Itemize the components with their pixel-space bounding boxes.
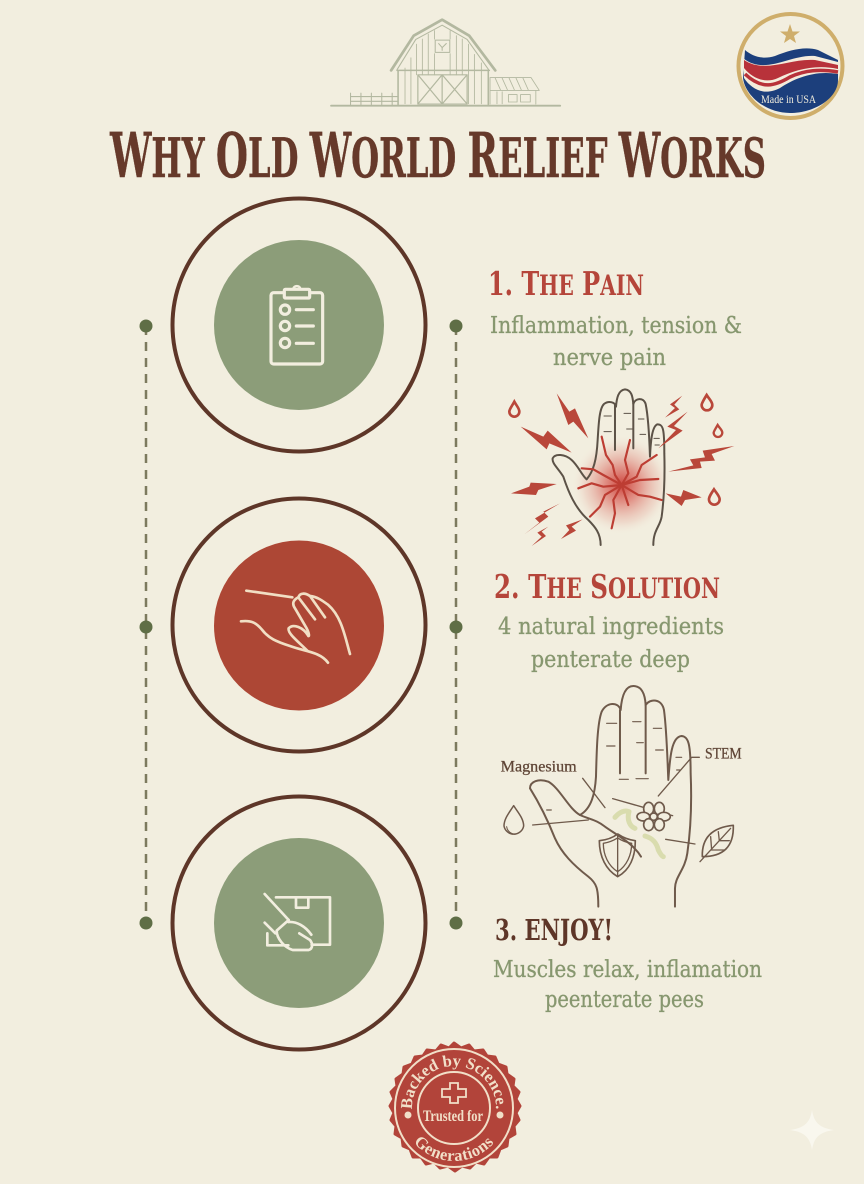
text: step 1 description (490, 313, 742, 371)
text: step 3 description (493, 957, 762, 1013)
step 1 ring (172, 198, 426, 452)
pain cracks (578, 437, 662, 528)
label: Magnesium: Magnesium (501, 759, 577, 776)
label: STEM: STEM (705, 746, 742, 763)
text: step 2 description: penterate deep (531, 647, 690, 673)
step 3 ring (172, 796, 426, 1050)
hand outline (553, 389, 665, 545)
text: step 2 description: 4 natural ingredients (498, 614, 724, 640)
timeline: right dashed connector (450, 320, 462, 930)
illustration: hand with pain burst (509, 389, 734, 546)
icon: flower (637, 802, 670, 831)
text: step 2 description (498, 614, 724, 673)
lightning bolts (511, 393, 734, 546)
icon: medical cross (442, 1083, 466, 1103)
text: step 1 description: Inflammation, tension & (490, 313, 742, 339)
badge: Made in USA (738, 14, 842, 118)
hand outline (530, 686, 699, 907)
title: WHY OLD WORLD RELIEF WORKS (109, 119, 766, 192)
icon: shield (599, 834, 635, 877)
illustration: hand with ingredients (501, 686, 742, 907)
seal center text: Trusted for (423, 1108, 483, 1125)
icon: water drop (504, 806, 524, 834)
seal: Backed by Science (388, 1042, 522, 1172)
icon: leaf (700, 825, 733, 862)
icon: clipboard checklist (271, 286, 323, 364)
step 2 ring (172, 498, 426, 752)
icon: sparkle watermark (790, 1110, 834, 1150)
heading: step 1: 1. THE PAIN (488, 264, 644, 303)
text: step 3 description: peenterate pees (545, 987, 704, 1013)
icon: hand holding box (265, 894, 330, 950)
flame droplets (509, 395, 722, 505)
heading: step 3: 3. ENJOY! (495, 913, 613, 947)
seal bottom text: Generations (416, 1137, 493, 1161)
badge label: Made in USA (761, 94, 817, 106)
timeline: left dashed connector (140, 320, 152, 930)
seal top text: Backed by Science. (400, 1055, 504, 1110)
ointment streaks (615, 811, 663, 857)
heading: step 2: 2. THE SOLUTION (494, 567, 720, 606)
icon: gold star (780, 24, 800, 43)
icon: hands touching (241, 591, 350, 663)
text: step 1 description: nerve pain (553, 345, 666, 371)
text: step 3 description: Muscles relax, inflamation (493, 957, 762, 983)
icon: barn illustration (331, 20, 560, 106)
